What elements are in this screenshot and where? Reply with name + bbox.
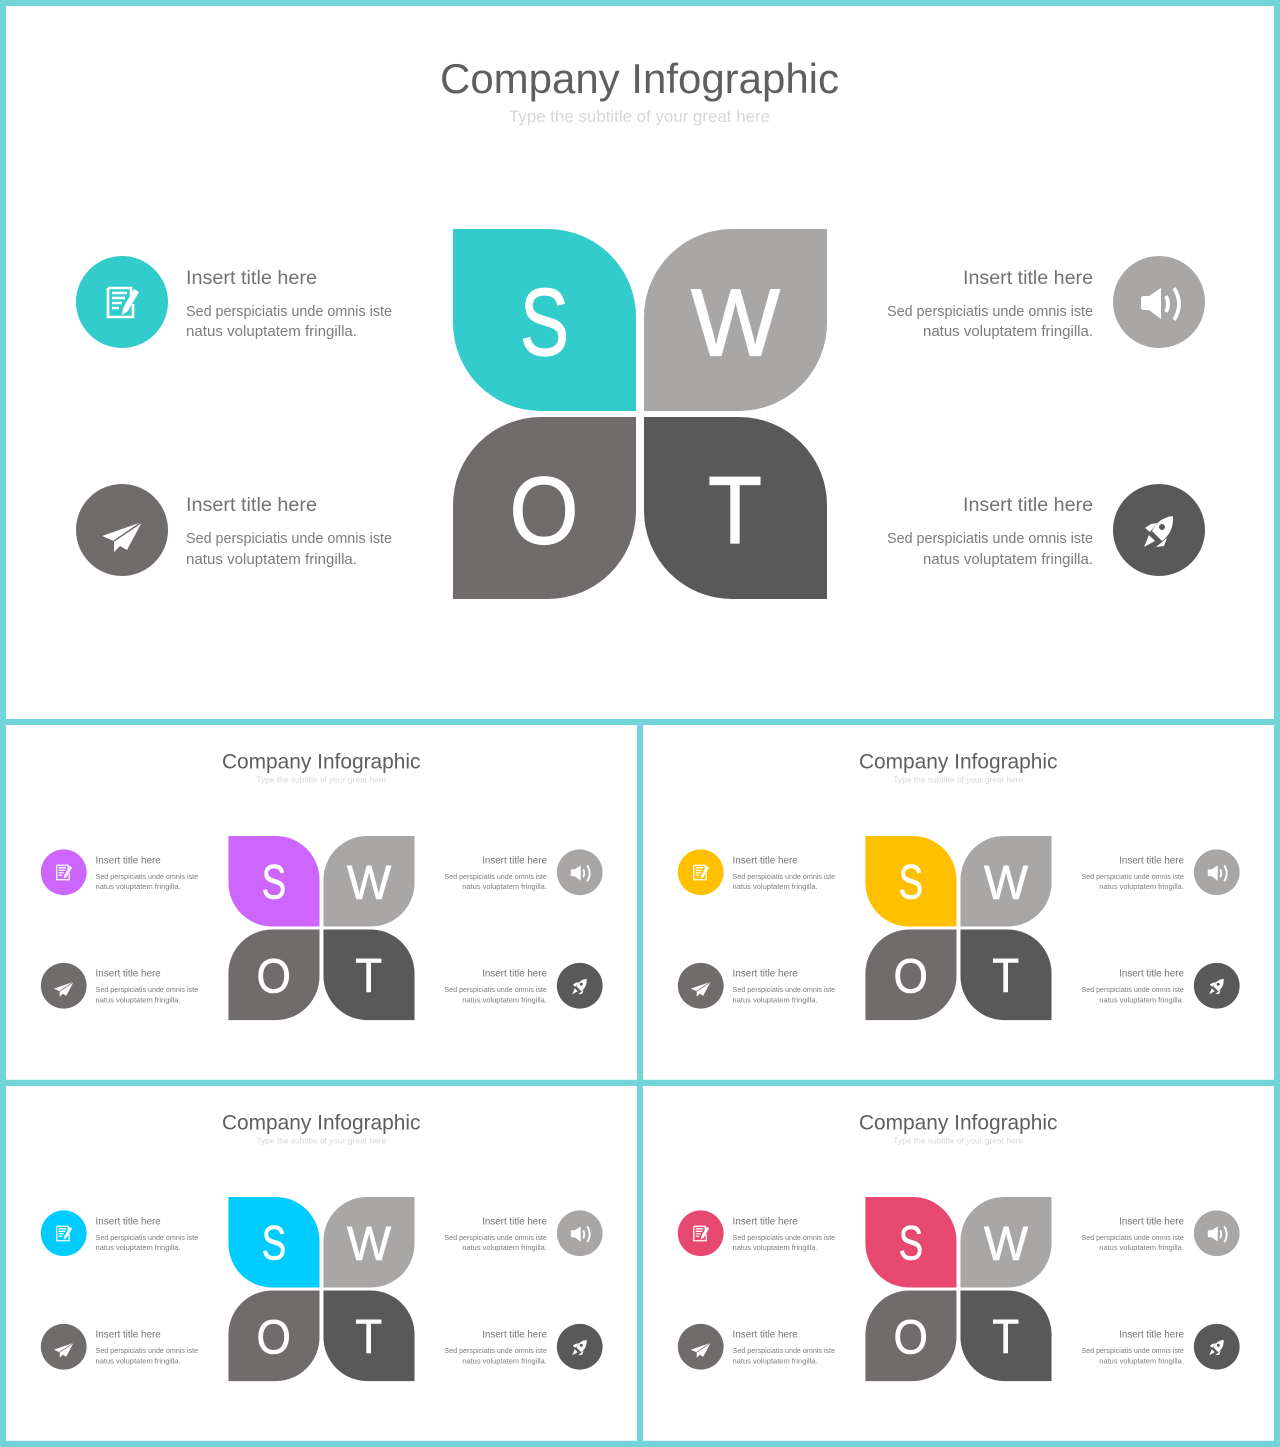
icon: rocket (557, 963, 603, 1009)
text block: weaknesses: natus voluptatem fringilla. (1099, 882, 1184, 891)
petal O (453, 417, 636, 599)
panel: purple slide (6, 725, 637, 1080)
text block: opportunities (733, 968, 835, 1005)
icon: rocket (1113, 484, 1205, 576)
text block: strengths: Sed perspiciatis unde omnis iste (733, 872, 835, 881)
petal T (644, 417, 827, 599)
panel: blue slide (6, 1086, 637, 1441)
petal S: S (899, 857, 923, 910)
subtitle: Type the subtitle of your great here (509, 107, 770, 126)
text block: opportunities: Insert title here (733, 968, 798, 979)
text block: weaknesses: Insert title here (1119, 855, 1184, 866)
text block: weaknesses: natus voluptatem fringilla. (1099, 1243, 1184, 1252)
text block: strengths: Insert title here (186, 267, 317, 289)
petal S (865, 836, 956, 927)
petal S: S (520, 269, 569, 376)
slide background (6, 6, 1274, 719)
text block: opportunities: Insert title here (733, 1329, 798, 1340)
text block: weaknesses: Insert title here (963, 267, 1093, 289)
text block: threats (444, 1329, 547, 1366)
petal T (323, 930, 415, 1020)
icon: document (678, 849, 724, 895)
text block: strengths: natus voluptatem fringilla. (733, 882, 818, 891)
text block: threats: Sed perspiciatis unde omnis iste (444, 985, 547, 994)
text block: weaknesses (444, 855, 547, 891)
text block: weaknesses: natus voluptatem fringilla. (462, 882, 547, 891)
petal W: W (691, 270, 780, 376)
text block: strengths (733, 855, 835, 891)
text block: threats: natus voluptatem fringilla. (923, 551, 1093, 568)
text block: opportunities (186, 494, 392, 568)
petal O: O (510, 458, 578, 564)
text block: opportunities: natus voluptatem fringilla. (733, 996, 818, 1005)
text block: opportunities: natus voluptatem fringilla. (186, 551, 357, 568)
text block: threats: Sed perspiciatis unde omnis iste (1081, 1346, 1184, 1355)
text block: threats: Sed perspiciatis unde omnis iste (444, 1346, 547, 1355)
text block: threats: Insert title here (482, 968, 547, 979)
text block: threats: natus voluptatem fringilla. (462, 996, 547, 1005)
icon: paper plane (678, 963, 724, 1009)
text block: threats: Sed perspiciatis unde omnis iste (1081, 985, 1184, 994)
text block: threats: Sed perspiciatis unde omnis iste (887, 530, 1093, 547)
petal O: O (894, 950, 928, 1003)
text block: strengths: Insert title here (733, 1216, 798, 1227)
petal T: T (992, 950, 1019, 1003)
text block: threats: natus voluptatem fringilla. (1099, 996, 1184, 1005)
text block: weaknesses (1081, 1216, 1184, 1252)
petal T: T (355, 950, 382, 1003)
petal T (323, 1291, 415, 1381)
title: Company Infographic (859, 750, 1058, 773)
icon: document (41, 1210, 87, 1256)
petal S: S (262, 1218, 286, 1271)
text block: threats: Insert title here (1119, 1329, 1184, 1340)
text block: strengths: Sed perspiciatis unde omnis iste (96, 872, 198, 881)
text block: strengths (96, 855, 198, 891)
text block: weaknesses: Sed perspiciatis unde omnis iste (444, 872, 547, 881)
title: Company Infographic (222, 1111, 421, 1134)
icon: paper plane (678, 1324, 724, 1370)
panel: pink slide (643, 1086, 1274, 1441)
text block: weaknesses: Insert title here (482, 1216, 547, 1227)
icon: speaker (1194, 849, 1240, 895)
subtitle: Type the subtitle of your great here (893, 775, 1023, 785)
icon: rocket (1194, 1324, 1240, 1370)
title: Company Infographic (222, 750, 421, 773)
panel: yellow slide (643, 725, 1274, 1080)
text block: weaknesses: Insert title here (482, 855, 547, 866)
icon: speaker (557, 1210, 603, 1256)
petal O (228, 930, 319, 1020)
text block: weaknesses: natus voluptatem fringilla. (923, 323, 1093, 340)
text block: threats: Insert title here (963, 494, 1093, 516)
petal S (865, 1197, 956, 1288)
text block: opportunities: Sed perspiciatis unde omnis iste (186, 530, 392, 547)
text block: weaknesses: Sed perspiciatis unde omnis iste (1081, 872, 1184, 881)
slide background (643, 1086, 1274, 1441)
icon: document (678, 1210, 724, 1256)
slide background (643, 725, 1274, 1080)
text block: strengths: Insert title here (733, 855, 798, 866)
petal O: O (894, 1311, 928, 1364)
text block: strengths: Insert title here (96, 855, 161, 866)
petal O (865, 1291, 956, 1381)
title: Company Infographic (859, 1111, 1058, 1134)
title: Company Infographic (440, 55, 839, 102)
text block: opportunities: natus voluptatem fringilla. (733, 1357, 818, 1366)
petal T: T (992, 1311, 1019, 1364)
text block: weaknesses: natus voluptatem fringilla. (462, 1243, 547, 1252)
text block: weaknesses: Insert title here (1119, 1216, 1184, 1227)
text block: opportunities: natus voluptatem fringilla. (96, 996, 181, 1005)
text block: weaknesses (1081, 855, 1184, 891)
text block: strengths (96, 1216, 198, 1252)
petal W (323, 1197, 415, 1288)
subtitle: Type the subtitle of your great here (256, 1136, 386, 1146)
text block: opportunities (96, 968, 198, 1005)
petal T: T (355, 1311, 382, 1364)
text block: opportunities: Sed perspiciatis unde omnis iste (733, 985, 835, 994)
text block: threats (887, 494, 1093, 568)
text block: strengths: natus voluptatem fringilla. (733, 1243, 818, 1252)
text block: opportunities (96, 1329, 198, 1366)
petal W: W (984, 857, 1028, 910)
petal T (960, 1291, 1052, 1381)
text block: threats: natus voluptatem fringilla. (1099, 1357, 1184, 1366)
petal O: O (257, 950, 291, 1003)
text block: weaknesses (887, 267, 1093, 340)
text block: strengths: natus voluptatem fringilla. (186, 323, 357, 340)
icon: paper plane (41, 963, 87, 1009)
text block: strengths: natus voluptatem fringilla. (96, 882, 181, 891)
text block: opportunities: Sed perspiciatis unde omnis iste (733, 1346, 835, 1355)
text block: opportunities: natus voluptatem fringilla. (96, 1357, 181, 1366)
text block: strengths: Sed perspiciatis unde omnis iste (186, 303, 392, 320)
petal W (960, 1197, 1052, 1288)
petal W (644, 229, 827, 411)
subtitle: Type the subtitle of your great here (893, 1136, 1023, 1146)
text block: opportunities: Sed perspiciatis unde omnis iste (96, 1346, 198, 1355)
petal W: W (347, 1218, 391, 1271)
icon: speaker (1194, 1210, 1240, 1256)
text block: opportunities: Insert title here (96, 1329, 161, 1340)
text block: strengths: Sed perspiciatis unde omnis iste (96, 1233, 198, 1242)
icon: document (76, 256, 168, 348)
petal S (453, 229, 636, 411)
text block: opportunities (733, 1329, 835, 1366)
petal S (228, 836, 319, 927)
text block: strengths: natus voluptatem fringilla. (96, 1243, 181, 1252)
text block: strengths (186, 267, 392, 340)
petal S: S (899, 1218, 923, 1271)
text block: threats: Insert title here (1119, 968, 1184, 979)
text block: threats (1081, 1329, 1184, 1366)
petal O (865, 930, 956, 1020)
petal W: W (347, 857, 391, 910)
icon: paper plane (41, 1324, 87, 1370)
text block: opportunities: Insert title here (96, 968, 161, 979)
petal S (228, 1197, 319, 1288)
text block: threats: natus voluptatem fringilla. (462, 1357, 547, 1366)
subtitle: Type the subtitle of your great here (256, 775, 386, 785)
text block: weaknesses: Sed perspiciatis unde omnis iste (1081, 1233, 1184, 1242)
text block: threats (1081, 968, 1184, 1005)
slide background (6, 725, 637, 1080)
petal W: W (984, 1218, 1028, 1271)
icon: speaker (557, 849, 603, 895)
text block: opportunities: Sed perspiciatis unde omnis iste (96, 985, 198, 994)
panel: main teal slide (6, 6, 1274, 719)
petal W (323, 836, 415, 927)
petal T: T (708, 457, 762, 564)
text block: threats (444, 968, 547, 1005)
petal S: S (262, 857, 286, 910)
icon: paper plane (76, 484, 168, 576)
text block: weaknesses: Sed perspiciatis unde omnis iste (444, 1233, 547, 1242)
text block: strengths (733, 1216, 835, 1252)
petal W (960, 836, 1052, 927)
text block: strengths: Sed perspiciatis unde omnis iste (733, 1233, 835, 1242)
icon: speaker (1113, 256, 1205, 348)
slide background (6, 1086, 637, 1441)
text block: opportunities: Insert title here (186, 494, 317, 516)
text block: strengths: Insert title here (96, 1216, 161, 1227)
icon: document (41, 849, 87, 895)
text block: threats: Insert title here (482, 1329, 547, 1340)
petal T (960, 930, 1052, 1020)
text block: weaknesses: Sed perspiciatis unde omnis iste (887, 303, 1093, 320)
icon: rocket (557, 1324, 603, 1370)
text block: weaknesses (444, 1216, 547, 1252)
icon: rocket (1194, 963, 1240, 1009)
petal O (228, 1291, 319, 1381)
petal O: O (257, 1311, 291, 1364)
